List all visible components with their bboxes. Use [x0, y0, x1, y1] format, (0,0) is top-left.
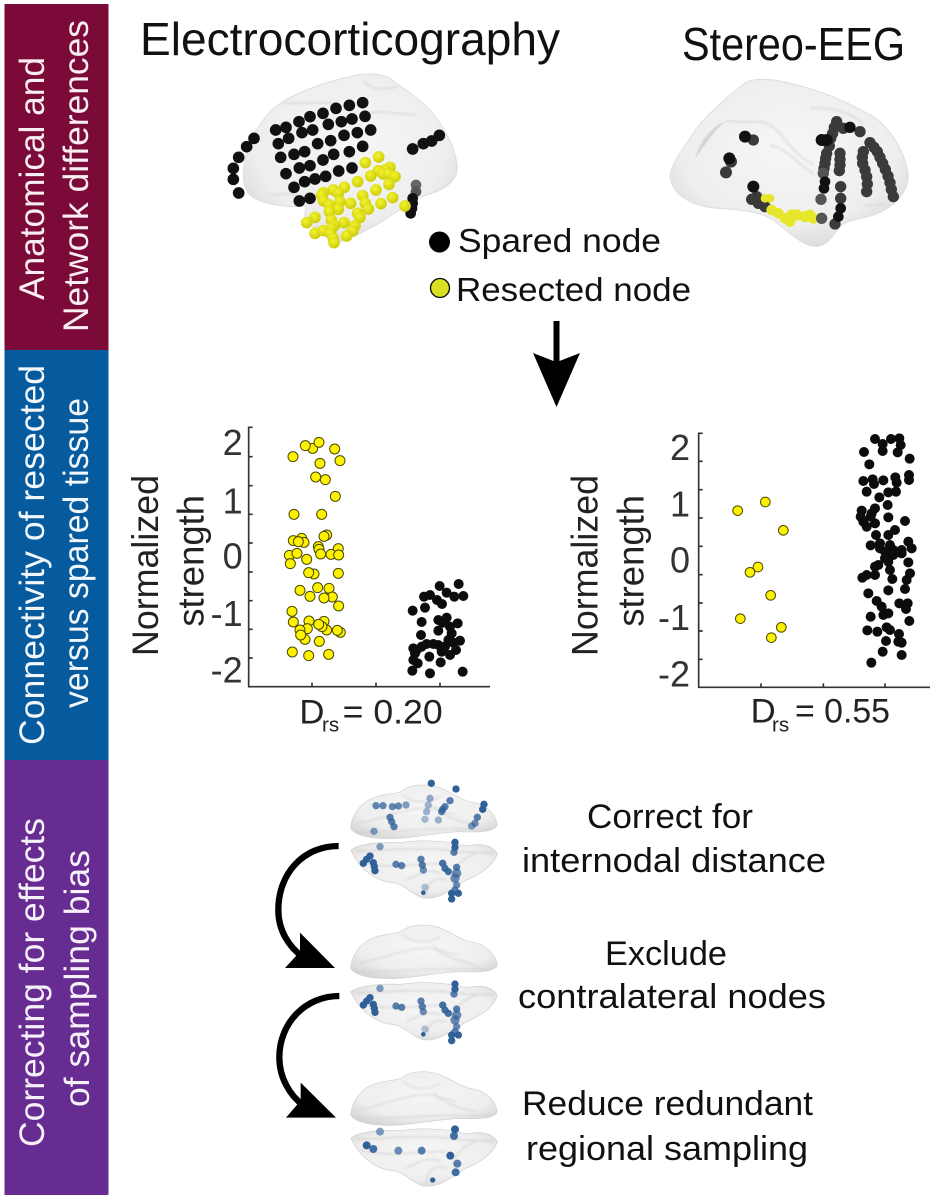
text: reduce redundant regional sampling: regional sampling	[526, 1130, 808, 1168]
text: correct for internodal distance: internodal distance	[522, 842, 826, 880]
chart: normalized strength, electrocorticography: -2	[211, 649, 243, 690]
legend: node types: Spared node	[458, 222, 661, 259]
text: exclude contralateral nodes: contralateral nodes	[518, 978, 826, 1016]
chart: normalized strength, electrocorticography: 2	[223, 422, 243, 463]
brain pair: reduce redundant regional sampling	[351, 1072, 497, 1186]
chart: normalized strength, stereo-EEG: 1	[670, 484, 690, 525]
chart: normalized strength, stereo-EEG: 2	[670, 427, 690, 468]
panel: connectivity of resected versus spared tissue: Connectivity of resected	[13, 365, 52, 745]
panel: correcting for effects of sampling bias: of sampling bias	[58, 850, 97, 1107]
chart: normalized strength, stereo-EEG: D	[751, 693, 776, 731]
chart: normalized strength, electrocorticography: = 0.20	[343, 693, 443, 731]
chart: normalized strength, electrocorticography: rs	[322, 714, 339, 737]
panel: connectivity of resected versus spared tissue: versus spared tissue	[57, 398, 96, 708]
panel: correcting for effects of sampling bias: Correcting for effects	[13, 818, 52, 1147]
chart: normalized strength, electrocorticography: Normalized	[124, 475, 166, 656]
chart: normalized strength, stereo-EEG: 0	[670, 540, 690, 581]
brain pair: internodal distance correction	[351, 780, 497, 903]
brain pair: exclude contralateral nodes	[351, 925, 497, 1044]
legend: node types: Resected node	[456, 271, 691, 308]
heading: Stereo-EEG: Stereo-EEG	[682, 18, 905, 70]
brain: electrocorticography electrodes	[227, 74, 457, 248]
text: reduce redundant regional sampling: Reduce redundant	[522, 1085, 814, 1123]
chart: normalized strength, stereo-EEG: -2	[658, 654, 690, 695]
chart: normalized strength, stereo-EEG: rs	[772, 714, 789, 737]
panel: connectivity of resected versus spared tissue	[4, 350, 108, 760]
heading: Electrocorticography: Electrocorticography	[140, 13, 560, 65]
chart: normalized strength, electrocorticography: 0	[223, 535, 243, 576]
text: reduce redundant regional sampling	[522, 1085, 814, 1168]
chart: normalized strength, stereo-EEG: -1	[658, 597, 690, 638]
text: correct for internodal distance	[522, 798, 826, 880]
arrow: curved, second correction step	[279, 996, 339, 1118]
panel: anatomical and network differences: Anatomical and	[13, 57, 52, 300]
chart: normalized strength, electrocorticography: strength	[169, 495, 211, 627]
panel: correcting for effects of sampling bias	[4, 760, 108, 1195]
chart: normalized strength, stereo-EEG: strength	[609, 495, 651, 627]
chart: normalized strength, stereo-EEG: = 0.55	[795, 693, 890, 731]
arrow: down to strength charts	[533, 321, 580, 407]
chart: normalized strength, stereo-EEG	[563, 427, 930, 737]
arrow: curved, first correction step	[278, 846, 339, 968]
text: exclude contralateral nodes: Exclude	[605, 935, 727, 973]
chart: normalized strength, stereo-EEG: Normalized	[563, 475, 605, 656]
text: exclude contralateral nodes	[518, 935, 826, 1016]
chart: normalized strength, electrocorticography: -1	[211, 593, 243, 634]
brain: stereo-EEG electrodes	[670, 80, 908, 247]
chart: normalized strength, electrocorticography: 1	[223, 480, 243, 521]
panel: anatomical and network differences	[4, 4, 108, 350]
legend: node types	[429, 222, 691, 308]
panel: anatomical and network differences: Network differences	[57, 20, 96, 332]
chart: normalized strength, electrocorticography	[124, 422, 490, 737]
chart: normalized strength, electrocorticography: D	[299, 693, 324, 731]
text: correct for internodal distance: Correct for	[587, 798, 753, 836]
